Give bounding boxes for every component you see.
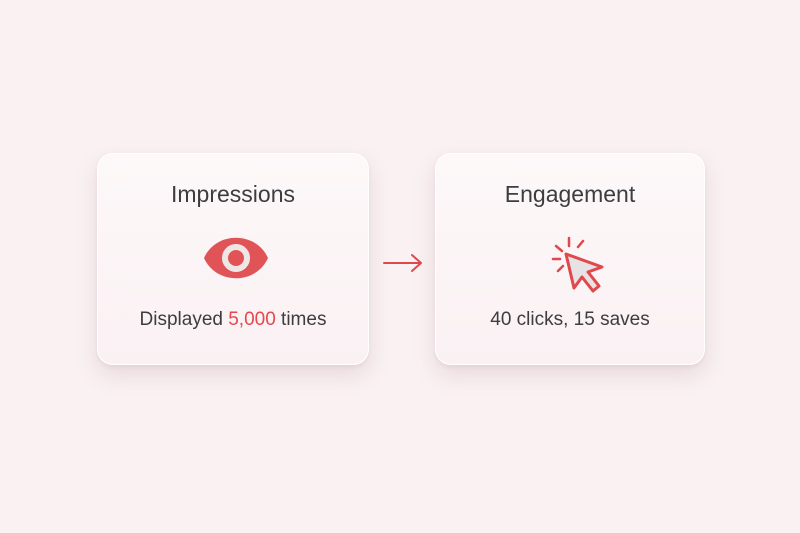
- arrow: [383, 254, 422, 272]
- text: clicks: 40 clicks, 15 saves: [490, 309, 650, 330]
- icon: eye: [204, 238, 268, 278]
- heading: engagement: Engagement: [505, 181, 635, 207]
- card: impressions: [97, 153, 369, 365]
- heading: impressions: Impressions: [171, 181, 295, 207]
- text: displayed: Displayed 5,000 times: [140, 309, 326, 330]
- icon: cursor click: [552, 236, 604, 293]
- card: engagement: [435, 153, 705, 365]
